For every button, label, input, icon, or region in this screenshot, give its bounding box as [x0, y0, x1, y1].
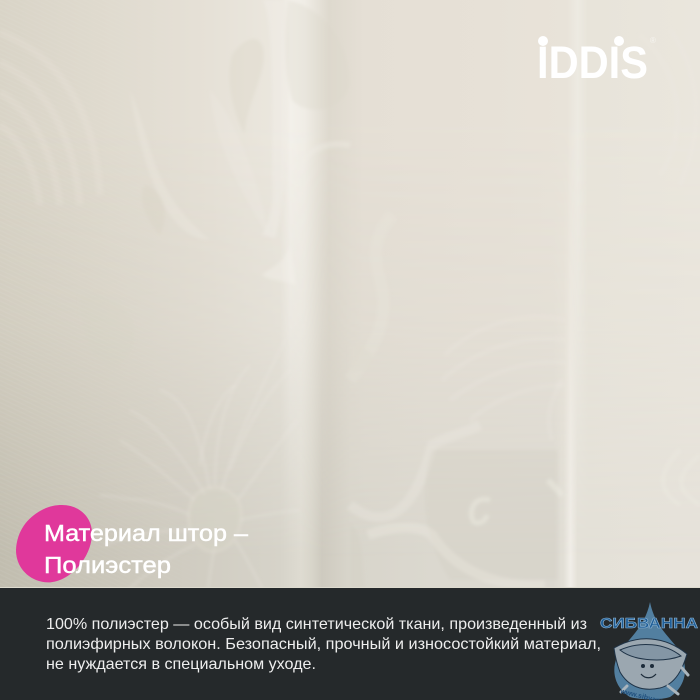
description text: 100% полиэстер — особый вид синтетической ткани, произведенный из [46, 616, 587, 633]
dark text band [0, 587, 700, 700]
heading: Полиэстер [44, 552, 171, 578]
description text: полиэфирных волокон. Безопасный, прочный и износостойкий материал, [46, 636, 601, 653]
brand logo: iddis: IDDIS [537, 37, 648, 88]
icon: water drop [614, 602, 685, 699]
heading [44, 520, 248, 578]
pink blob [16, 505, 92, 582]
heading: Материал штор – [44, 520, 248, 546]
brand logo: iddis: ® [650, 36, 656, 45]
description text: не нуждается в специальном уходе. [46, 656, 316, 673]
icon: bathtub [614, 639, 688, 694]
watermark: sibvanna bathtub drop [600, 602, 698, 700]
description text [46, 616, 601, 673]
watermark name: СИБВАННА [600, 615, 698, 632]
